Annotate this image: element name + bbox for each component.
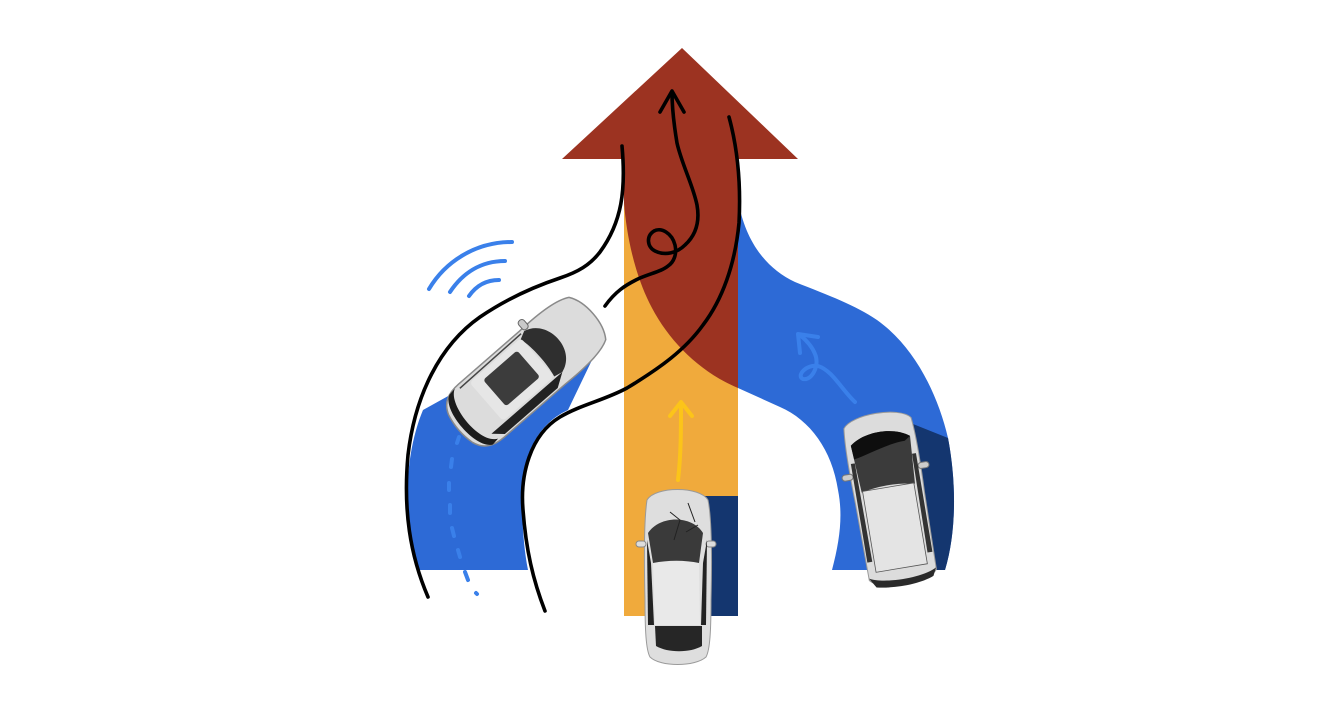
body	[644, 490, 712, 664]
tailgate shadow	[869, 567, 938, 591]
windscreen	[518, 318, 576, 379]
side windows	[647, 540, 654, 625]
lower side window	[491, 372, 568, 441]
car: left, angled	[431, 281, 616, 457]
rear window	[655, 626, 702, 651]
sunroof	[483, 350, 540, 406]
dashed blue trail	[449, 437, 477, 594]
car: right, tilted	[832, 406, 948, 593]
mirrors	[842, 474, 853, 482]
centre lane: navy shadow	[705, 496, 738, 616]
centre lane: orange shaft	[624, 159, 738, 616]
car: centre, bottom	[636, 490, 716, 664]
body	[841, 408, 940, 590]
large red arrow	[562, 48, 798, 388]
yellow arrow	[670, 402, 692, 480]
windscreen dark reflection	[849, 427, 912, 460]
wifi signal arcs	[429, 242, 512, 296]
black squiggle arrow	[605, 91, 698, 306]
roof	[469, 338, 554, 421]
left lane: blue curved road	[407, 360, 592, 570]
windscreen	[648, 520, 703, 563]
left black road edge	[406, 146, 623, 597]
right lane: blue curved road	[738, 200, 954, 570]
windscreen	[849, 427, 918, 493]
windscreen cracks	[670, 503, 698, 540]
light blue squiggle arrow	[798, 334, 855, 402]
side windows	[851, 463, 872, 563]
mirrors	[636, 541, 646, 547]
roof	[653, 561, 700, 625]
rear bumper shadow	[440, 389, 499, 452]
mirror	[517, 318, 529, 331]
right black road edge	[522, 117, 740, 611]
upper side line	[459, 334, 522, 388]
roof	[863, 483, 927, 572]
body	[436, 287, 616, 457]
right lane: navy shadow	[908, 422, 954, 570]
